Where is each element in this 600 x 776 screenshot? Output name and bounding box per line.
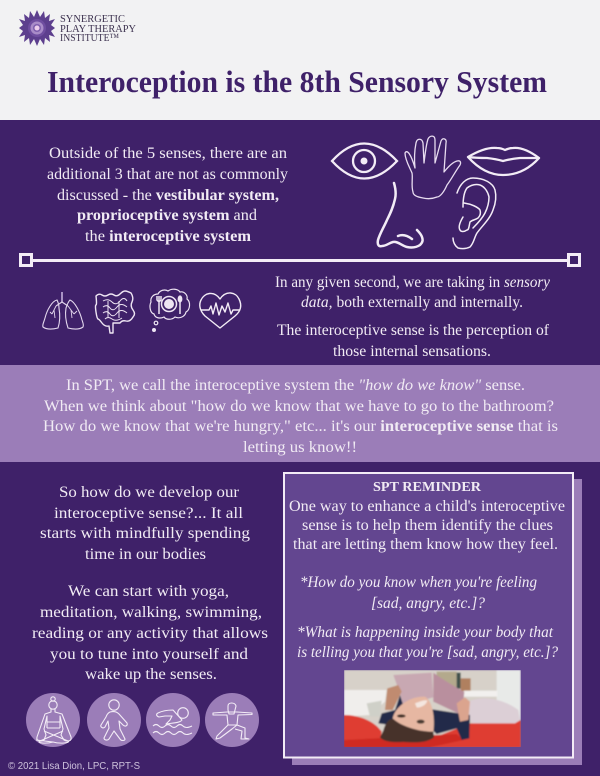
activities text: meditation, walking, swimming, <box>40 604 262 621</box>
panel: how do we know band <box>0 365 600 462</box>
reminder questions: [sad, angry, etc.]? <box>371 595 485 612</box>
reminder text: that are letting them know how they feel. <box>293 536 558 553</box>
develop text: time in our bodies <box>85 546 206 563</box>
logo wordmark: PLAY THERAPY <box>60 23 136 35</box>
icon: lungs <box>43 292 83 329</box>
icon: meditation <box>26 693 80 747</box>
intro text: proprioceptive system and <box>77 207 257 224</box>
reminder questions: *What is happening inside your body that <box>297 624 554 641</box>
icon: flower logo <box>19 10 55 46</box>
icon: eye <box>332 144 397 178</box>
activities text: you to tune into yourself and <box>50 646 248 663</box>
sensory data text: In any given second, we are taking in sensory <box>275 274 550 291</box>
intro text: discussed - the vestibular system, <box>57 187 279 204</box>
band text: letting us know!! <box>243 439 357 456</box>
intro text: additional 3 that are not as commonly <box>47 166 288 183</box>
photo: child reading upside down <box>344 670 521 747</box>
develop text <box>40 484 250 563</box>
reminder box border <box>284 473 573 758</box>
intro text: the interoceptive system <box>85 228 251 245</box>
activities text: reading or any activity that allows <box>32 625 268 642</box>
icon: walking <box>87 693 141 747</box>
panel: develop sense <box>0 462 600 776</box>
intro text: Outside of the 5 senses, there are an <box>49 145 287 162</box>
logo wordmark: INSTITUTE™ <box>60 32 119 44</box>
sensory data text: The interoceptive sense is the perception of <box>277 322 550 339</box>
divider connector <box>20 254 580 266</box>
band text: How do we know that we're hungry," etc... it's our interoceptive sense that is <box>43 418 558 435</box>
sensory data text: those internal sensations. <box>333 343 491 360</box>
icon: warrior pose <box>205 693 259 747</box>
icon: lips <box>468 148 539 175</box>
icon: hand <box>405 136 461 199</box>
reminder questions: is telling you that you're [sad, angry, etc.]? <box>297 644 558 661</box>
reminder questions <box>297 574 558 661</box>
sensory data text: data, both externally and internally. <box>301 294 523 311</box>
icon: nose <box>378 183 423 247</box>
develop text: So how do we develop our <box>59 484 240 501</box>
logo wordmark: SYNERGETIC <box>60 13 125 25</box>
header band <box>0 0 600 120</box>
title: Interoception is the 8th Sensory System <box>47 64 547 99</box>
icon: ear <box>453 178 496 249</box>
intro text <box>47 145 288 245</box>
activities text: We can start with yoga, <box>68 583 229 600</box>
band text: When we think about "how do we know that we have to go to the bathroom? <box>44 398 554 415</box>
reminder questions: *How do you know when you're feeling <box>300 574 537 591</box>
band text <box>43 377 558 456</box>
activities text: wake up the senses. <box>85 666 217 683</box>
icon: thought bubble with plate <box>150 289 190 331</box>
logo <box>19 10 136 46</box>
logo wordmark <box>60 13 136 44</box>
reminder text: One way to enhance a child's interoceptive <box>289 498 565 515</box>
icon: intestines <box>96 291 134 333</box>
reminder heading: SPT REMINDER <box>373 480 482 495</box>
icon: heart with pulse <box>200 293 241 328</box>
icon: swimming <box>146 693 200 747</box>
develop text: starts with mindfully spending <box>40 525 250 542</box>
activities text <box>32 583 268 683</box>
reminder text: sense is to help them identify the clues <box>302 517 553 534</box>
panel: senses <box>0 120 600 365</box>
reminder box shadow <box>292 479 582 765</box>
copyright: © 2021 Lisa Dion, LPC, RPT-S <box>8 761 140 772</box>
reminder text <box>289 498 565 553</box>
develop text: interoceptive sense?... It all <box>54 505 243 522</box>
panel: SPT reminder <box>284 473 582 765</box>
band text: In SPT, we call the interoceptive system the "how do we know" sense. <box>66 377 525 394</box>
sensory data text <box>275 274 550 360</box>
